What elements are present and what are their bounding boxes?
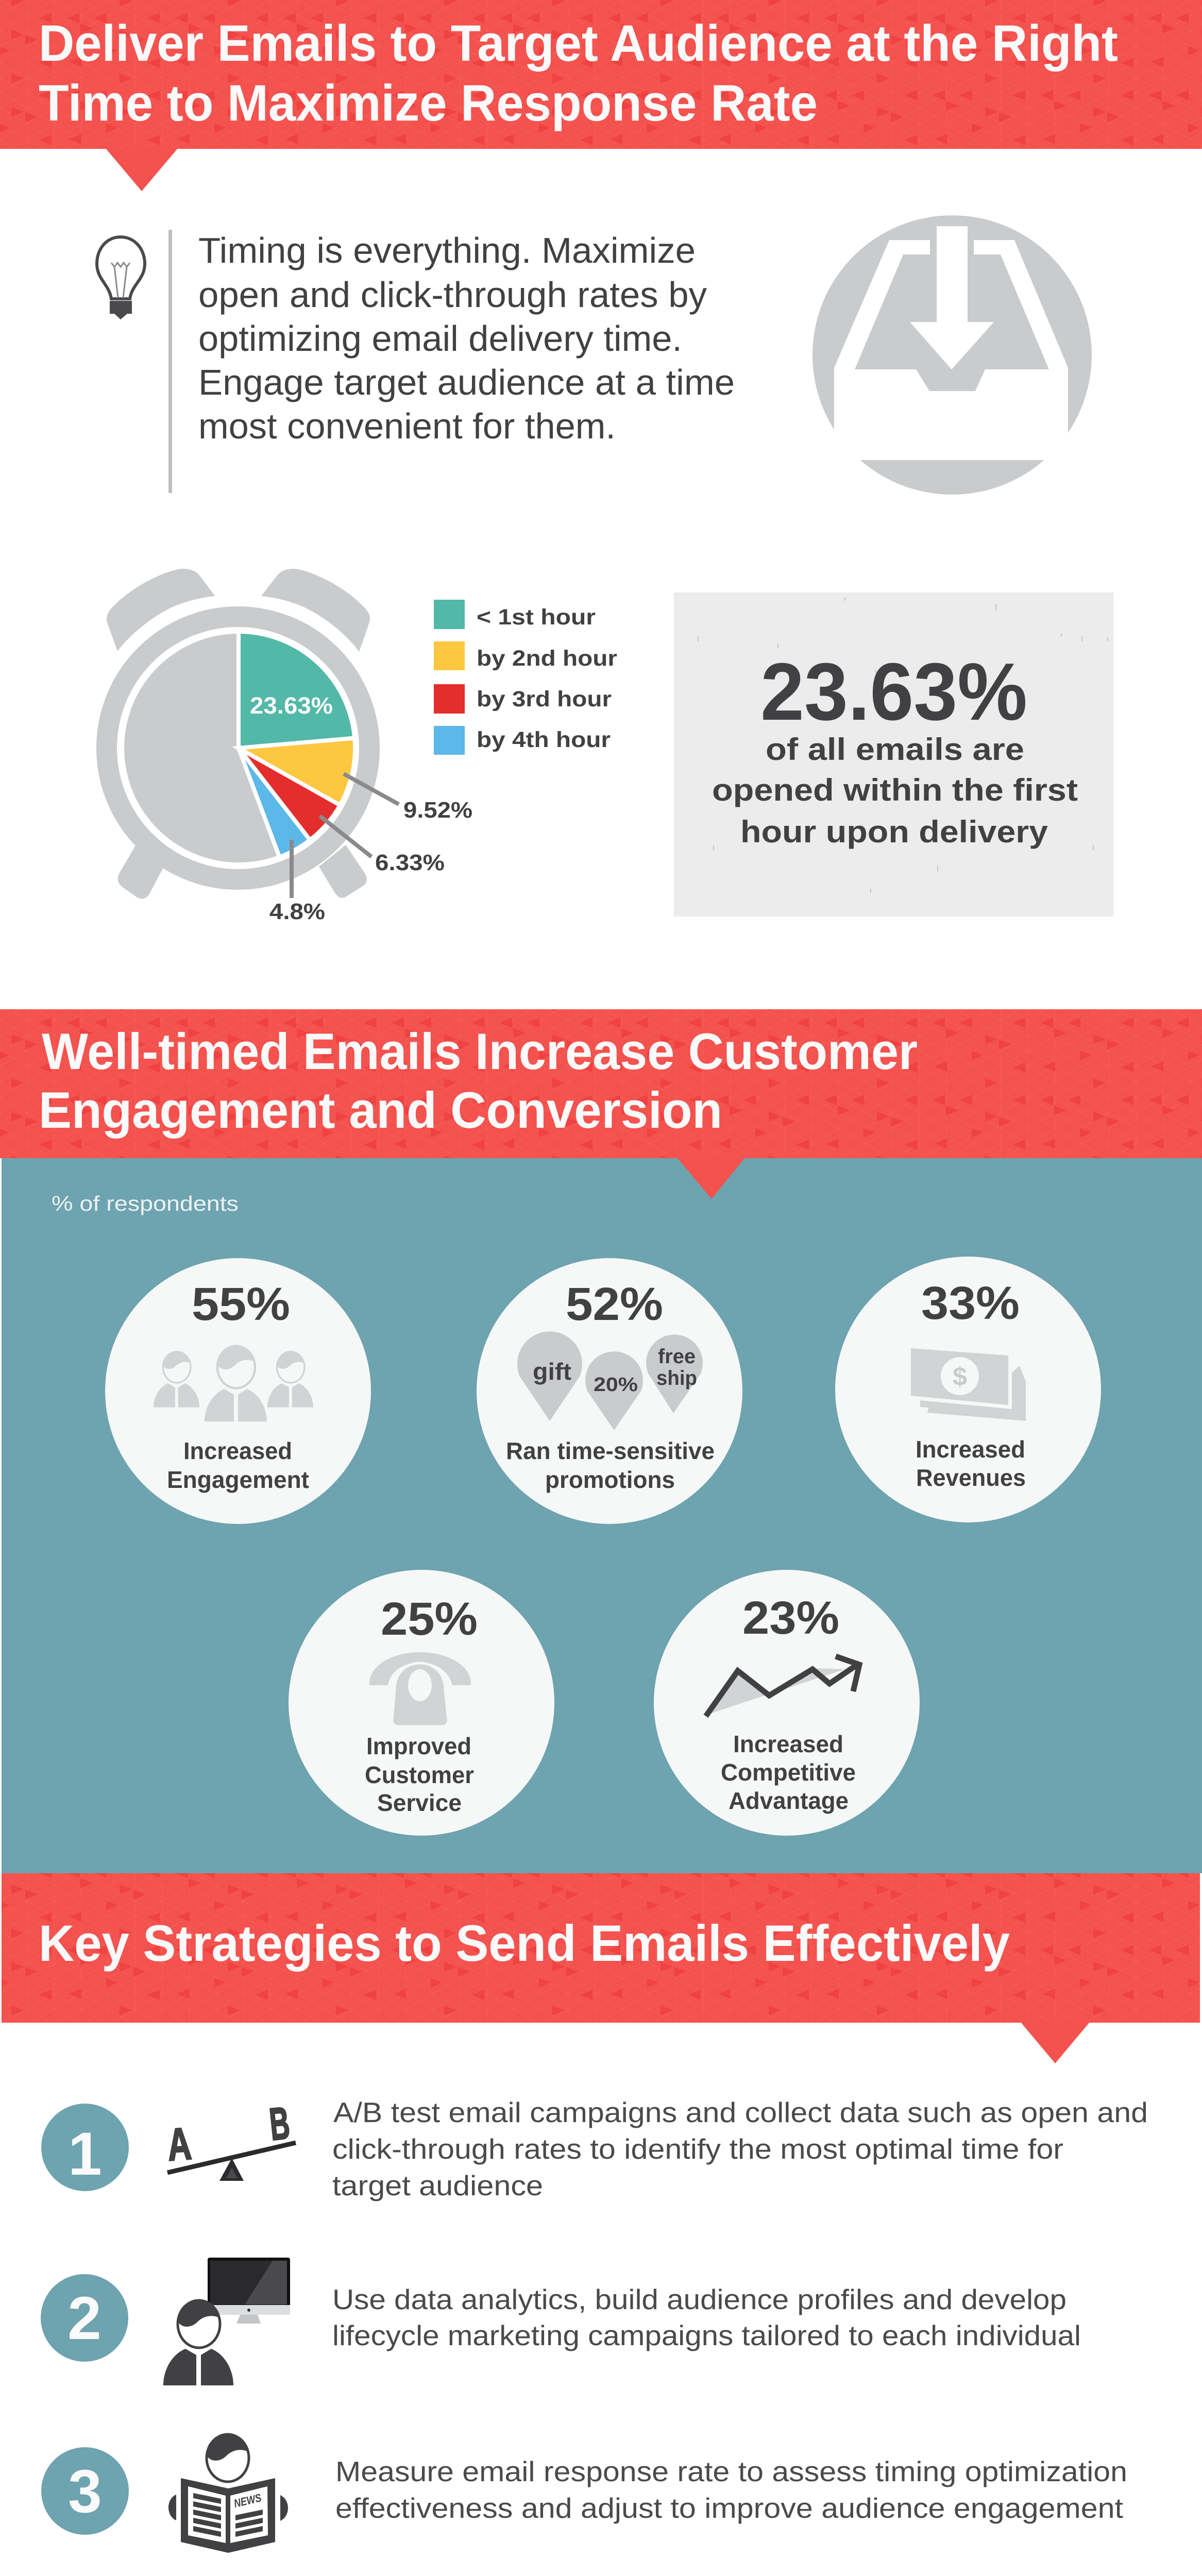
- number badge 1: 1: [68, 2120, 102, 2188]
- strategy 3: [41, 2434, 1127, 2553]
- title: deliver emails: [39, 14, 1118, 131]
- panel: teal respondents section: [2, 1158, 1202, 1873]
- legend: by 4th hour: [477, 727, 611, 752]
- title: well-timed emails: [39, 1023, 918, 1139]
- strategy text 1: target audience: [332, 2170, 543, 2201]
- strategy text 3: [335, 2455, 1127, 2524]
- legend: < 1st hour: [477, 605, 596, 630]
- value labels: 6.33%: [375, 850, 445, 875]
- stat: increased revenues: Revenues: [916, 1464, 1026, 1491]
- stat: increased engagement: Engagement: [167, 1466, 309, 1493]
- pie slice: second hour: [239, 738, 355, 805]
- icon: light bulb: [97, 237, 145, 319]
- intro text block: [198, 230, 735, 446]
- icon: person reading newspaper: NEWS: [233, 2491, 263, 2510]
- banner: section 3 heading: [2, 1873, 1200, 2063]
- intro text block: Timing is everything. Maximize: [198, 230, 696, 270]
- stat: time-sensitive promotions: [477, 1258, 742, 1524]
- icon: person reading newspaper: [168, 2434, 288, 2553]
- stat: increased engagement: Increased: [183, 1437, 292, 1464]
- strategy text 3: effectiveness and adjust to improve audience engagement: [335, 2492, 1123, 2524]
- number badge 3: [41, 2447, 129, 2535]
- intro text block: optimizing email delivery time.: [198, 318, 682, 359]
- intro text block: open and click-through rates by: [198, 275, 707, 315]
- stat: increased revenues: Increased: [916, 1436, 1025, 1463]
- icon: telephone: [369, 1652, 471, 1726]
- icon: promo pins: 20%: [594, 1374, 638, 1396]
- banner: section 2 heading: [0, 1009, 1202, 1199]
- strategy text 1: A/B test email campaigns and collect data such as open and: [333, 2096, 1148, 2128]
- strategy text 1: [332, 2096, 1148, 2201]
- number badge 2: 2: [67, 2284, 101, 2352]
- icon: promo pins: gift: [533, 1358, 571, 1385]
- caption: percent of respondents: % of respondents: [52, 1192, 239, 1215]
- clock ring: [107, 617, 369, 879]
- stat: improved customer service: Service: [377, 1789, 462, 1816]
- leader lines: [292, 774, 399, 898]
- title: deliver emails: Time to Maximize Response Rate: [39, 74, 818, 131]
- stat description: [712, 732, 1078, 849]
- stat: time-sensitive promotions: promotions: [545, 1466, 675, 1493]
- strategy text 2: lifecycle marketing campaigns tailored to each individual: [332, 2319, 1081, 2351]
- icon: A/B seesaw: A: [166, 2118, 193, 2170]
- chart: alarm clock pie: [107, 569, 472, 924]
- strategy 2: [41, 2258, 1081, 2385]
- stat: increased engagement: [105, 1258, 371, 1524]
- number badge 1: [41, 2104, 129, 2191]
- big stat: 23.63%: [760, 647, 1027, 737]
- value labels: 4.8%: [269, 899, 325, 924]
- banner: section 1 heading: [0, 0, 1202, 191]
- title: deliver emails: Deliver Emails to Target Audience at the Right: [39, 14, 1118, 72]
- strategy text 2: Use data analytics, build audience profiles and develop: [332, 2283, 1066, 2315]
- stat: time-sensitive promotions: Ran time-sensitive: [506, 1437, 715, 1464]
- stat: time-sensitive promotions: 52%: [566, 1279, 663, 1330]
- pie slice: third hour: [239, 748, 340, 840]
- pie slice: first hour: [239, 632, 354, 748]
- value labels: [269, 798, 472, 924]
- pie slice: fourth hour: [239, 748, 310, 857]
- icon: cash stack: [911, 1348, 1026, 1421]
- icon: A/B seesaw: [166, 2097, 296, 2181]
- stat: improved customer service: Improved: [366, 1733, 471, 1759]
- icon: three people: [154, 1346, 313, 1421]
- stat: improved customer service: [289, 1570, 554, 1836]
- stat description: hour upon delivery: [740, 815, 1048, 849]
- strategy text 3: Measure email response rate to assess timing optimization: [335, 2455, 1127, 2487]
- stat: increased competitive advantage: 23%: [742, 1592, 839, 1644]
- strategy text 2: [332, 2283, 1081, 2351]
- intro text block: most convenient for them.: [198, 406, 616, 446]
- icon: promo pins: free: [658, 1345, 696, 1368]
- strategy text 1: click-through rates to identify the most optimal time for: [332, 2133, 1063, 2165]
- value labels: 9.52%: [403, 798, 472, 823]
- vertical divider: [168, 230, 172, 493]
- legend: [434, 600, 617, 755]
- stat: increased engagement: 55%: [192, 1279, 290, 1330]
- stat: increased competitive advantage: [654, 1570, 920, 1836]
- stat description: opened within the first: [712, 773, 1078, 807]
- stat: improved customer service: 25%: [381, 1594, 478, 1645]
- title: well-timed emails: Well-timed Emails Increase Customer: [42, 1023, 918, 1080]
- number badge 2: [41, 2274, 128, 2362]
- strategy 1: [41, 2096, 1148, 2201]
- stat: increased competitive advantage: Advantage: [729, 1787, 849, 1814]
- number badge 3: 3: [68, 2458, 102, 2526]
- icon: monitor: [208, 2258, 290, 2324]
- stat description: of all emails are: [766, 732, 1024, 767]
- icon: trend arrow: [705, 1656, 859, 1716]
- icon: person: [163, 2300, 233, 2385]
- intro text block: Engage target audience at a time: [198, 362, 735, 402]
- pie slice: remaining: [122, 632, 280, 865]
- icon: promo pins: [517, 1331, 703, 1430]
- icon: A/B seesaw: B: [267, 2097, 292, 2150]
- clock bells and feet: [107, 569, 370, 899]
- stat: increased competitive advantage: Increased: [733, 1731, 843, 1757]
- legend: by 2nd hour: [477, 646, 617, 671]
- icon: cash stack: $: [953, 1362, 967, 1391]
- legend: by 3rd hour: [477, 687, 612, 711]
- icon: inbox with download arrow: [812, 215, 1092, 495]
- icon: promo pins: ship: [656, 1367, 697, 1389]
- stat: increased revenues: [835, 1257, 1101, 1522]
- stat: improved customer service: Customer: [365, 1761, 474, 1788]
- title: well-timed emails: Engagement and Conversion: [39, 1081, 722, 1139]
- stat: increased revenues: 33%: [921, 1278, 1020, 1329]
- stat: increased competitive advantage: Competitive: [721, 1759, 856, 1786]
- panel: paper stat card: [674, 592, 1113, 917]
- pie label: 23.63%: [250, 692, 333, 719]
- title: key strategies: Key Strategies to Send Emails Effectively: [39, 1914, 1010, 1972]
